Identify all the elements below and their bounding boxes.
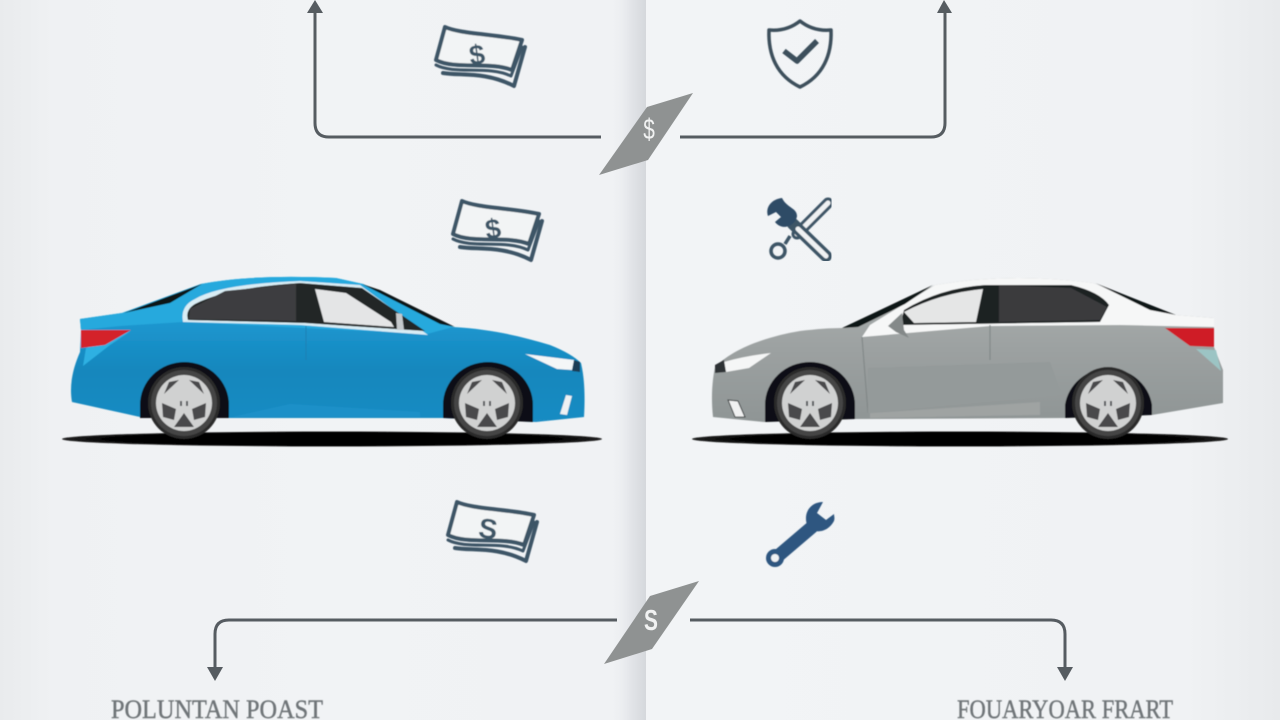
grey car rear wheel [1072,367,1144,439]
top centre dollar parallelogram [599,93,693,175]
grey car window frame [900,285,1109,325]
blue car front wheel arch [443,362,533,422]
grey car door lines [862,325,990,413]
ground shadow: blue car [62,432,602,446]
grey car body [712,278,1223,422]
blue car headlight [525,354,574,370]
grey car front window [904,289,983,323]
grey car windshield strip [842,285,933,328]
icon: money stack top: $ [467,38,487,71]
grey car white roof panel [862,278,1214,337]
blue car tail light [81,330,131,348]
icon: shield with check [769,21,831,87]
grey car front wheel [774,367,846,439]
blue car grille [572,360,580,372]
blue car rear wheel [148,367,220,439]
ground shadow: grey car [692,432,1228,446]
grey car rear strip [1095,283,1176,315]
blue car mirror [396,313,404,330]
grey car rear window [999,285,1107,322]
grey car [692,278,1228,446]
blue car window strip rear [124,284,202,313]
grey car tail light [1165,328,1214,347]
blue car rear panel highlight [83,331,131,366]
blue car upper panel highlight [80,277,453,334]
grey car lower door shade [868,362,1062,413]
icon: money stack top [436,27,525,86]
grey car fog lamp [728,400,745,417]
grey car headlight [724,353,771,372]
blue car door line [305,326,307,360]
grey car rear reflector [1196,349,1221,371]
blue car body [71,277,585,422]
blue car front window [315,289,394,327]
icon: wrench [766,502,834,567]
icon: money stack middle [453,201,542,260]
blue car fog lamp [560,395,572,415]
blue car rear window [189,284,296,321]
blue car [62,277,602,446]
blue car front wheel [451,367,523,439]
grey car mirror [888,313,909,338]
blue car rear wheel arch [140,362,229,418]
blue car window frame [187,283,425,331]
icon: money stack bottom: S [477,512,500,546]
bottom centre dollar parallelogram [604,581,699,664]
icon: money stack middle: $ [483,213,503,245]
arrow: bottom right, pointing down [690,620,1073,681]
blue car window trim [182,281,428,335]
grey car front wheel arch [765,362,855,422]
arrow: bottom left, pointing down [207,620,617,681]
arrow: top right, pointing up [680,0,952,137]
bottom centre dollar parallelogram: S [644,605,658,637]
arrow: top left, pointing up [307,0,601,137]
icon: crossed wrench and screwdriver [767,198,828,258]
icon: money stack bottom [448,502,537,561]
blue car windshield strip [362,284,455,327]
blue car lower sill highlight [232,404,420,417]
grey car rear wheel arch [1065,368,1152,418]
grey car grille [715,360,726,373]
top centre dollar parallelogram: $ [643,114,655,146]
grey car sill highlight [870,402,1040,418]
